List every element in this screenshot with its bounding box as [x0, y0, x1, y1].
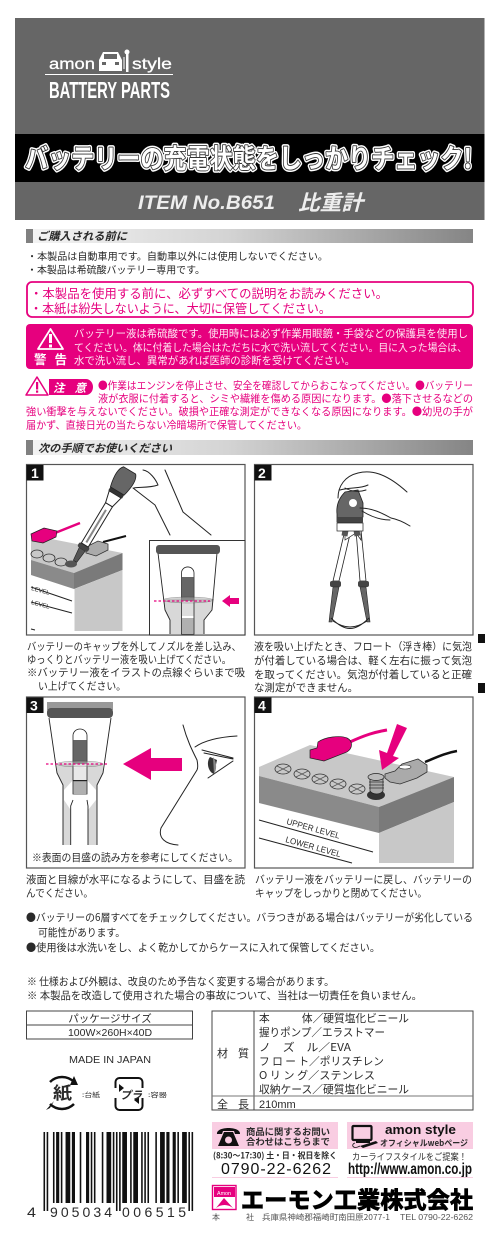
panel: step 3: ※表面の目盛の読み方を参考にしてください。 — [32, 850, 238, 865]
barcode: 905034 — [50, 1204, 112, 1220]
text block: bullet notes — [26, 910, 473, 955]
text block: head office address — [212, 1212, 474, 1223]
text block: head office address: 本 — [212, 1212, 220, 1223]
panel: contact: (8:30〜17:30) 土・日・祝日を除く — [213, 1150, 337, 1162]
heading: before purchase: ご購入される前に — [37, 228, 128, 244]
panel: contact: 0790-22-6262 — [221, 1161, 331, 1178]
text block: step 2 caption: を取ってください。気泡が付着していると正確 — [254, 667, 472, 682]
text block: step 4 caption: キャップをしっかりと閉めてください。 — [255, 886, 427, 900]
icon: amon emblem — [212, 1186, 236, 1210]
text block: product use — [27, 248, 328, 276]
illustration: closing the battery cap — [259, 730, 457, 863]
table: materials: 収納ケース／硬質塩化ビニール — [259, 1081, 409, 1097]
icon: plastic recycling mark — [110, 1078, 168, 1110]
text block: step 1 caption: バッテリーのキャップを外してノズルを差し込み、 — [27, 639, 241, 654]
heading: procedure: 次の手順でお使いください — [38, 440, 173, 456]
panel: step 2 — [254, 464, 473, 635]
panel: warning: 警 告 — [34, 349, 67, 368]
text block: step 2 caption — [254, 639, 472, 695]
number badge 2 — [254, 465, 272, 481]
panel: caution — [26, 377, 473, 432]
panel: warning — [26, 324, 473, 369]
item number — [138, 187, 366, 217]
text block: step 1 caption: ゆっくりとバッテリー液を吸い上げてください。 — [27, 652, 231, 667]
brand logo: amon — [49, 56, 95, 73]
heading: procedure — [26, 440, 473, 456]
illustration: reading the float — [46, 702, 113, 845]
heading: before purchase — [26, 228, 473, 244]
text block: step 3 caption: んでください。 — [26, 886, 93, 900]
callout: read instructions: ・本製品を使用する前に、必ずすべての説明をお読みください。 — [30, 284, 388, 302]
icon: paper recycling mark: 紙 — [53, 1079, 72, 1104]
panel: website: http://www.amon.co.jp — [348, 1161, 472, 1178]
text block: step 4 caption — [255, 872, 472, 900]
text block: head office address: 社 — [246, 1212, 254, 1223]
text block: disclaimers — [27, 974, 422, 1003]
text block: step 4 caption: バッテリー液をバッテリーに戻し、バッテリーの — [255, 872, 472, 887]
text block: disclaimers: ※ 仕様および外観は、改良のため予告なく変更する場合があります。 — [27, 974, 334, 989]
number badge 3 — [26, 698, 44, 714]
panel: caution: 液が衣服に付着すると、シミや繊維を傷める原因になります。●落下させるなどの — [98, 391, 473, 406]
number badge 4 — [254, 698, 272, 714]
number badge 2: 2 — [258, 465, 266, 481]
number badge 1: 1 — [31, 465, 39, 481]
icon: plastic recycling mark: プラ — [120, 1087, 143, 1103]
panel: website: オフィシャルwebページ — [380, 1137, 468, 1149]
item number: ITEM No.B651 — [138, 193, 275, 214]
panel: step 3 — [26, 697, 245, 868]
table: materials: 材 質 — [217, 1045, 249, 1061]
table: package size: 100W×260H×40D — [68, 1027, 152, 1039]
arrow — [222, 595, 239, 607]
icon: computer — [352, 1126, 378, 1148]
number badge 1 — [26, 465, 44, 481]
icon: paper recycling mark: :台紙 — [82, 1089, 101, 1099]
illustration: battery with hydrometer: LEVEL — [30, 586, 51, 597]
barcode: 006515 — [122, 1204, 186, 1220]
callout: read instructions — [27, 282, 473, 317]
table: materials: フ ロ ー ト／ポリスチレン — [259, 1053, 384, 1069]
inset: float detail — [150, 540, 245, 635]
header panel — [15, 18, 484, 220]
text block: product use: ・本製品は希硫酸バッテリー専用です。 — [27, 262, 205, 276]
text block: bullet notes: ●使用後は水洗いをし、よく乾かしてからケースに入れて保管してください。 — [26, 940, 380, 955]
panel: website — [347, 1122, 473, 1178]
text block: product use: ・本製品は自動車用です。自動車以外には使用しないでください。 — [27, 248, 328, 263]
icon: paper recycling mark — [46, 1076, 101, 1110]
panel: contact: 合わせはこちらまで — [246, 1135, 330, 1148]
text block: step 1 caption — [27, 639, 245, 694]
illustration: shaking the hydrometer — [329, 472, 410, 628]
illustration: battery with hydrometer — [30, 465, 211, 631]
panel: caution: 届かず、直接日光の当たらない冷暗場所で保管してください。 — [26, 418, 307, 432]
brand logo — [45, 50, 173, 103]
table: package size: パッケージサイズ — [68, 1011, 152, 1026]
main title: バッテリーの充電状態をしっかりチェック! — [25, 138, 472, 177]
text block: step 3 caption — [26, 872, 245, 900]
panel: website: カーライフスタイルをご提案！ — [352, 1150, 467, 1163]
brand logo: style — [132, 56, 172, 73]
text block: disclaimers: ※ 本製品を改造して使用された場合の事故について、当社は一切責任を負いません。 — [27, 988, 422, 1003]
brand logo: BATTERY PARTS — [49, 77, 170, 103]
icon: amon emblem: Amon — [217, 1191, 231, 1197]
icon: plastic recycling mark: :容器 — [148, 1089, 168, 1099]
arrow: line of sight — [123, 748, 182, 780]
company logo: エーモン工業株式会社 — [241, 1181, 473, 1215]
panel: contact: 商品に関するお問い — [246, 1125, 330, 1138]
table: materials: ノ ズ ル／EVA — [259, 1039, 351, 1055]
text block: bullet notes: ●バッテリーの6層すべてをチェックしてください。バラつきがある場合はバッテリーが劣化している — [26, 910, 473, 925]
table: materials — [212, 1010, 473, 1112]
panel: caution: ●作業はエンジンを停止させ、安全を確認してからおこなってください。●バッテリー — [98, 378, 473, 393]
text: made in japan: MADE IN JAPAN — [69, 1055, 151, 1066]
number badge 4: 4 — [258, 698, 266, 714]
text block: step 1 caption: ※バッテリー液をイラストの点線ぐらいまで吸 — [27, 665, 245, 680]
panel: caution: 強い衝撃を与えないでください。破損や正確な測定ができなくなる原因になります。●幼児の手が — [26, 404, 473, 419]
panel: contact — [212, 1122, 338, 1178]
illustration: closing the battery cap: UPPER LEVEL — [285, 816, 341, 841]
table: materials: 210mm — [259, 1099, 296, 1111]
panel: step 4 — [254, 697, 473, 868]
table: package size — [26, 1011, 192, 1039]
text block: head office address: TEL 0790-22-6262 — [400, 1213, 474, 1222]
table: materials: O リ ン グ／ステンレス — [259, 1067, 375, 1083]
icon: telephone — [217, 1128, 240, 1146]
icon: caution badge — [26, 377, 93, 396]
icon: warning triangle — [38, 329, 63, 349]
table: materials: 全 長 — [217, 1096, 249, 1112]
text block: step 2 caption: が付着している場合は、軽く左右に振って気泡 — [254, 653, 472, 668]
arrow: cap direction — [379, 724, 407, 770]
table: materials: 本 体／硬質塩化ビニール — [259, 1010, 409, 1026]
text block: step 2 caption: な測定ができません。 — [254, 680, 358, 695]
text block: bullet notes: 可能性があります。 — [38, 925, 125, 940]
main title: バッテリーの充電状態をしっかりチェック! — [25, 138, 472, 177]
text block: step 1 caption: い上げてください。 — [38, 678, 126, 694]
panel: warning: 水で洗い流し、異常があれば医師の診断を受けてください。 — [74, 353, 355, 368]
illustration: battery with hydrometer: LEVEL — [30, 600, 51, 611]
illustration: closing the battery cap: LOWER LEVEL — [284, 834, 342, 859]
panel: warning: バッテリー液は希硫酸です。使用時には必ず作業用眼鏡・手袋などの保護具を使用し — [74, 326, 468, 341]
icon: caution badge: 注 意 — [53, 380, 88, 396]
text block: head office address: 兵庫県神崎郡福崎町南田原2077-1 — [262, 1212, 390, 1223]
panel: warning: てください。体に付着した場合はただちに水で洗い流してください。目に入った場合は、 — [74, 340, 467, 355]
table: materials: 握りポンプ／エラストマー — [259, 1024, 385, 1040]
item number: 比重計 — [298, 187, 366, 217]
callout: read instructions: ・本紙は紛失しないように、大切に保管してください。 — [30, 299, 331, 317]
illustration: face and eye — [160, 725, 237, 845]
barcode: 4 — [27, 1204, 36, 1220]
panel: step 1 — [26, 464, 245, 635]
pink battery cap — [310, 737, 352, 761]
panel: website: amon style — [385, 1122, 456, 1137]
text block: step 3 caption: 液面と目線が水平になるようにして、目盛を読 — [26, 872, 245, 887]
text block: step 2 caption: 液を吸い上げたとき、フロート（浮き棒）に気泡 — [254, 639, 472, 654]
barcode — [27, 1132, 193, 1220]
number badge 3: 3 — [30, 698, 38, 714]
